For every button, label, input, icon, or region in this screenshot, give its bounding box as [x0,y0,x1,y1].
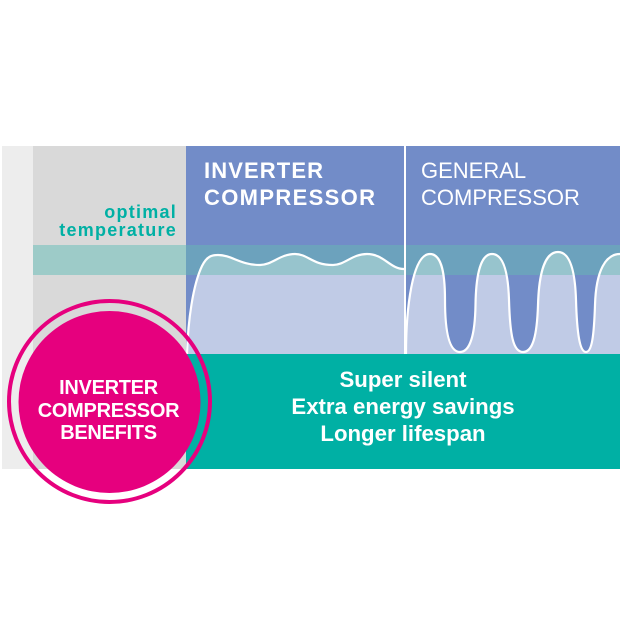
text: benefits list: Longer lifespan [320,421,486,446]
text: benefits list [291,367,515,446]
badge: inverter compressor benefits [9,301,210,502]
heading: inverter compressor [204,158,375,210]
band: optimal temperature range over grey [33,245,186,275]
text: benefits list: Super silent [340,367,467,392]
label: optimal temperature: optimal [104,202,177,222]
panel: light grey side strip [2,146,34,469]
text: benefits list: Extra energy savings [291,394,515,419]
panel: grey temperature column [33,146,186,469]
divider between compressor columns [404,146,406,354]
chart: general compressor curve line [406,252,620,354]
panel: blue chart background [186,146,620,354]
badge: inverter compressor benefits: BENEFITS [60,422,157,444]
badge: inverter compressor benefits: COMPRESSOR [38,400,180,422]
label: optimal temperature: temperature [59,220,177,240]
heading: general compressor: GENERAL [421,158,526,183]
band: optimal temperature range over chart [186,245,620,275]
chart: general compressor curve fill [406,252,620,354]
label: optimal temperature [59,202,177,240]
chart: inverter compressor curve line [187,254,404,354]
heading: general compressor: COMPRESSOR [421,185,580,210]
heading: inverter compressor: INVERTER [204,158,323,183]
heading: general compressor [421,158,580,210]
badge: inverter compressor benefits: INVERTER [59,377,159,399]
chart: inverter compressor curve fill [187,254,404,354]
heading: inverter compressor: COMPRESSOR [204,185,375,210]
panel: teal benefits [186,354,620,469]
